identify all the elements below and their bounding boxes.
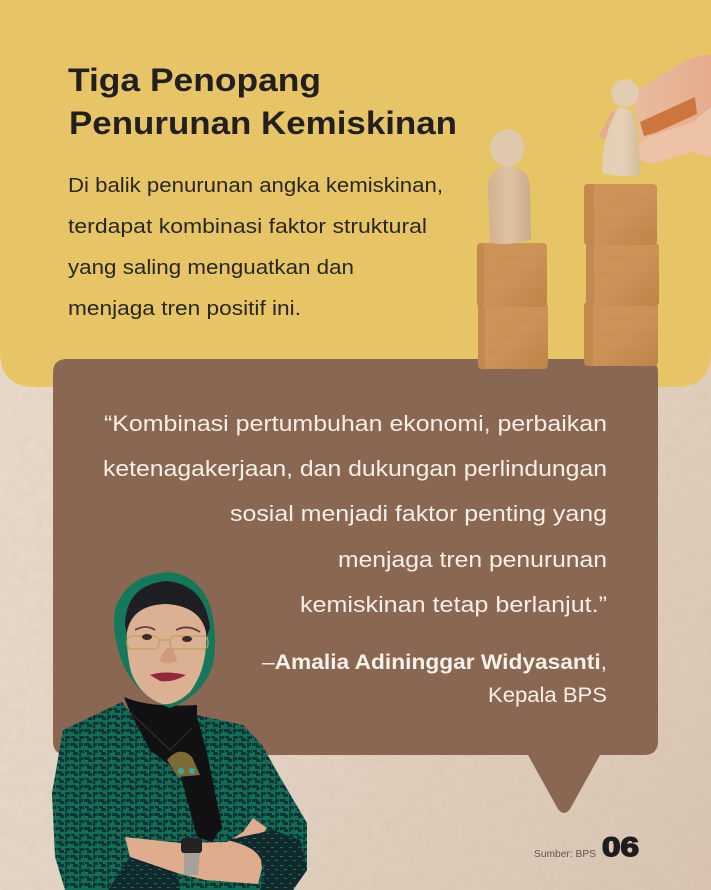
page number: 06 [602,832,639,862]
quote text: ketenagakerjaan, dan dukungan perlindungan [103,456,607,481]
title: Tiga Penopang [68,62,321,98]
intro text: terdapat kombinasi faktor struktural [68,216,427,238]
jacket sleeve cuff, right [227,830,307,890]
jacket [52,702,307,890]
headscarf [114,572,215,708]
quote attribution: Kepala BPS [488,684,607,707]
forearms [125,818,267,884]
portrait: woman with green headscarf and batik jacket [52,572,307,890]
quote text [103,411,607,617]
lips [150,672,186,681]
eyes [142,634,192,642]
quote text: sosial menjadi faktor penting yang [230,501,607,526]
nose [160,648,177,664]
intro text: Di balik penurunan angka kemiskinan, [68,175,443,197]
glasses [127,636,208,649]
icon: right block stack [584,184,659,366]
icon: hand holding peg [598,55,711,163]
panel: yellow header [0,0,711,387]
face [127,604,206,704]
necklace [130,712,200,777]
panel: quote speech bubble [53,359,658,813]
title: Penurunan Kemiskinan [69,105,457,141]
quote text: kemiskinan tetap berlanjut.” [300,592,607,617]
quote attribution: –Amalia Adininggar Widyasanti , [262,651,607,674]
intro text: yang saling menguatkan dan [68,257,354,279]
source label: Sumber: BPS [534,848,596,860]
jacket sleeve cuff, left [108,857,180,890]
icon: right wooden peg [602,79,640,176]
wristwatch [181,838,202,875]
intro text [68,175,443,320]
icon: left wooden peg [488,129,531,244]
intro text: menjaga tren positif ini. [68,298,301,320]
quote text: menjaga tren penurunan [338,547,607,572]
quote text: “Kombinasi pertumbuhan ekonomi, perbaikan [104,411,607,436]
eyebrows [135,627,200,632]
title [68,62,457,141]
inner head cap [125,581,210,640]
icon: left block stack [477,243,548,369]
quote attribution [262,651,607,707]
illustration: wooden blocks and pegs [477,55,711,369]
black inner top and neck [124,697,222,842]
